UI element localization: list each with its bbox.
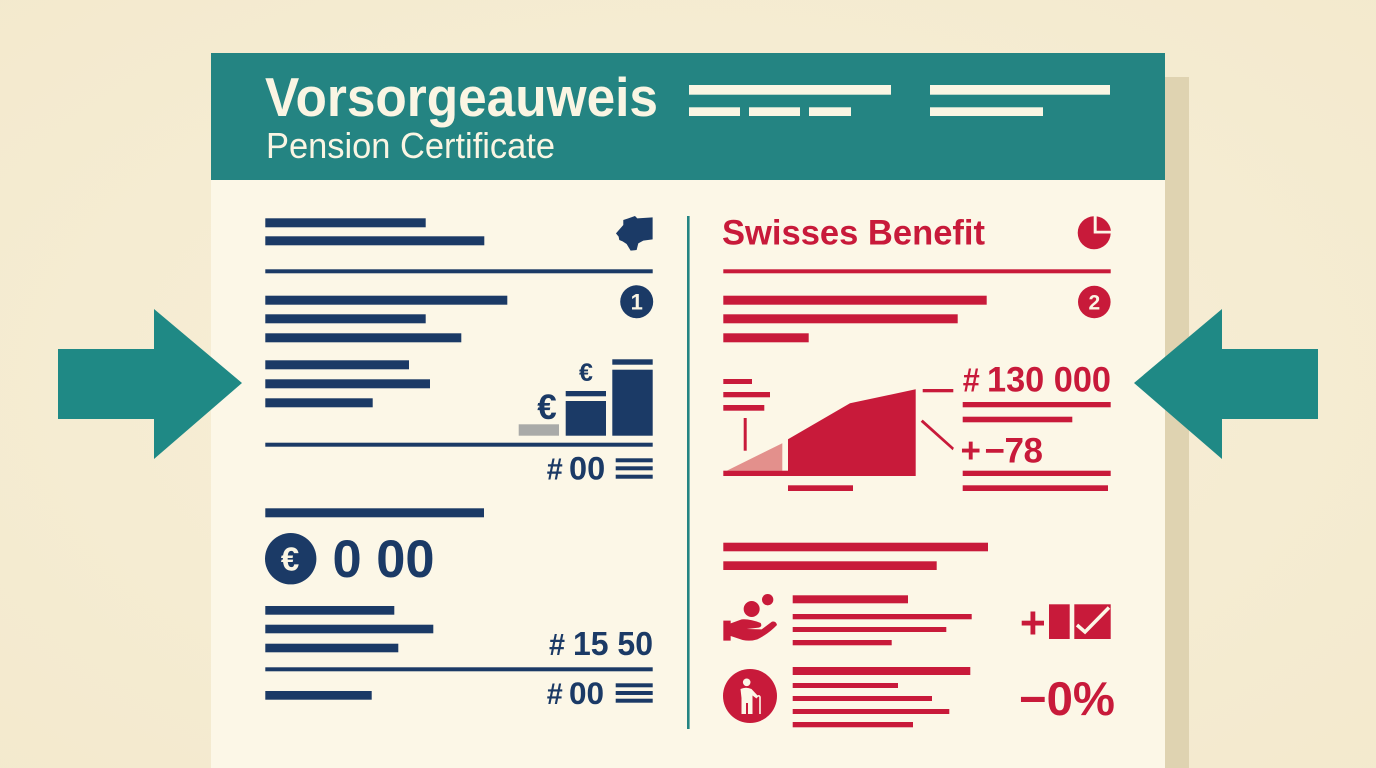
icon: lines xyxy=(616,458,653,479)
value: # 00: 00 xyxy=(569,675,604,711)
value: # 00 xyxy=(547,450,605,486)
area chart xyxy=(723,379,954,491)
text lines: value two xyxy=(963,471,1111,491)
text lines: section xyxy=(723,543,988,570)
arrow: left xyxy=(58,309,242,459)
heading: Swisses Benefit xyxy=(722,214,985,252)
text lines: row two xyxy=(793,667,970,727)
value: # 130 000: # xyxy=(963,362,980,398)
value: −0%: −0% xyxy=(1019,672,1115,725)
icon: euro circle xyxy=(265,533,316,584)
icon: lines xyxy=(616,683,653,703)
text lines: section three xyxy=(265,606,433,652)
value: + −78: +−78 xyxy=(960,431,1043,470)
header band xyxy=(211,53,1165,180)
bar chart: euro steps: € xyxy=(579,359,593,387)
panel: right column xyxy=(722,214,1115,727)
card shadow xyxy=(235,77,1189,768)
center divider xyxy=(687,216,690,729)
badge: 1: 1 xyxy=(631,290,643,314)
value: # 15 50: 15 50 xyxy=(573,625,653,662)
value: 0 00: 0 00 xyxy=(332,530,434,589)
arrow: right xyxy=(1134,309,1318,459)
subtitle: Pension Certificate xyxy=(266,125,555,166)
panel: left column xyxy=(265,216,653,711)
badge: 1 xyxy=(620,285,653,318)
text lines: row one xyxy=(793,595,972,645)
text lines: section one xyxy=(265,296,507,342)
value: # 15 50: # xyxy=(549,627,565,662)
value: # 00: # xyxy=(547,452,563,486)
icon: euro circle: € xyxy=(281,540,299,578)
certificate card xyxy=(211,53,1165,768)
icon: senior with cane xyxy=(723,669,777,723)
value: # 00: 00 xyxy=(569,450,605,486)
text lines: value one xyxy=(963,402,1111,422)
text lines: section two xyxy=(265,360,430,407)
text line xyxy=(265,691,372,700)
bar chart: euro steps xyxy=(519,359,653,436)
value: # 00 xyxy=(547,675,604,711)
bar chart: euro steps: € xyxy=(537,388,557,427)
text lines: benefit intro xyxy=(723,296,987,342)
value: # 00: # xyxy=(547,678,563,711)
header text lines xyxy=(265,218,484,245)
value: # 130 000: 130 000 xyxy=(987,360,1111,400)
badge: 2: 2 xyxy=(1088,292,1100,314)
badge: 2 xyxy=(1078,286,1111,318)
icon: map xyxy=(616,216,653,251)
icon: hand with coins xyxy=(723,594,777,641)
title: Vorsorgeauweis xyxy=(265,66,658,128)
icon: pie chart xyxy=(1078,216,1111,249)
text line xyxy=(265,508,484,517)
header placeholder lines xyxy=(689,85,1110,116)
icon: plus and check boxes xyxy=(1022,604,1111,639)
